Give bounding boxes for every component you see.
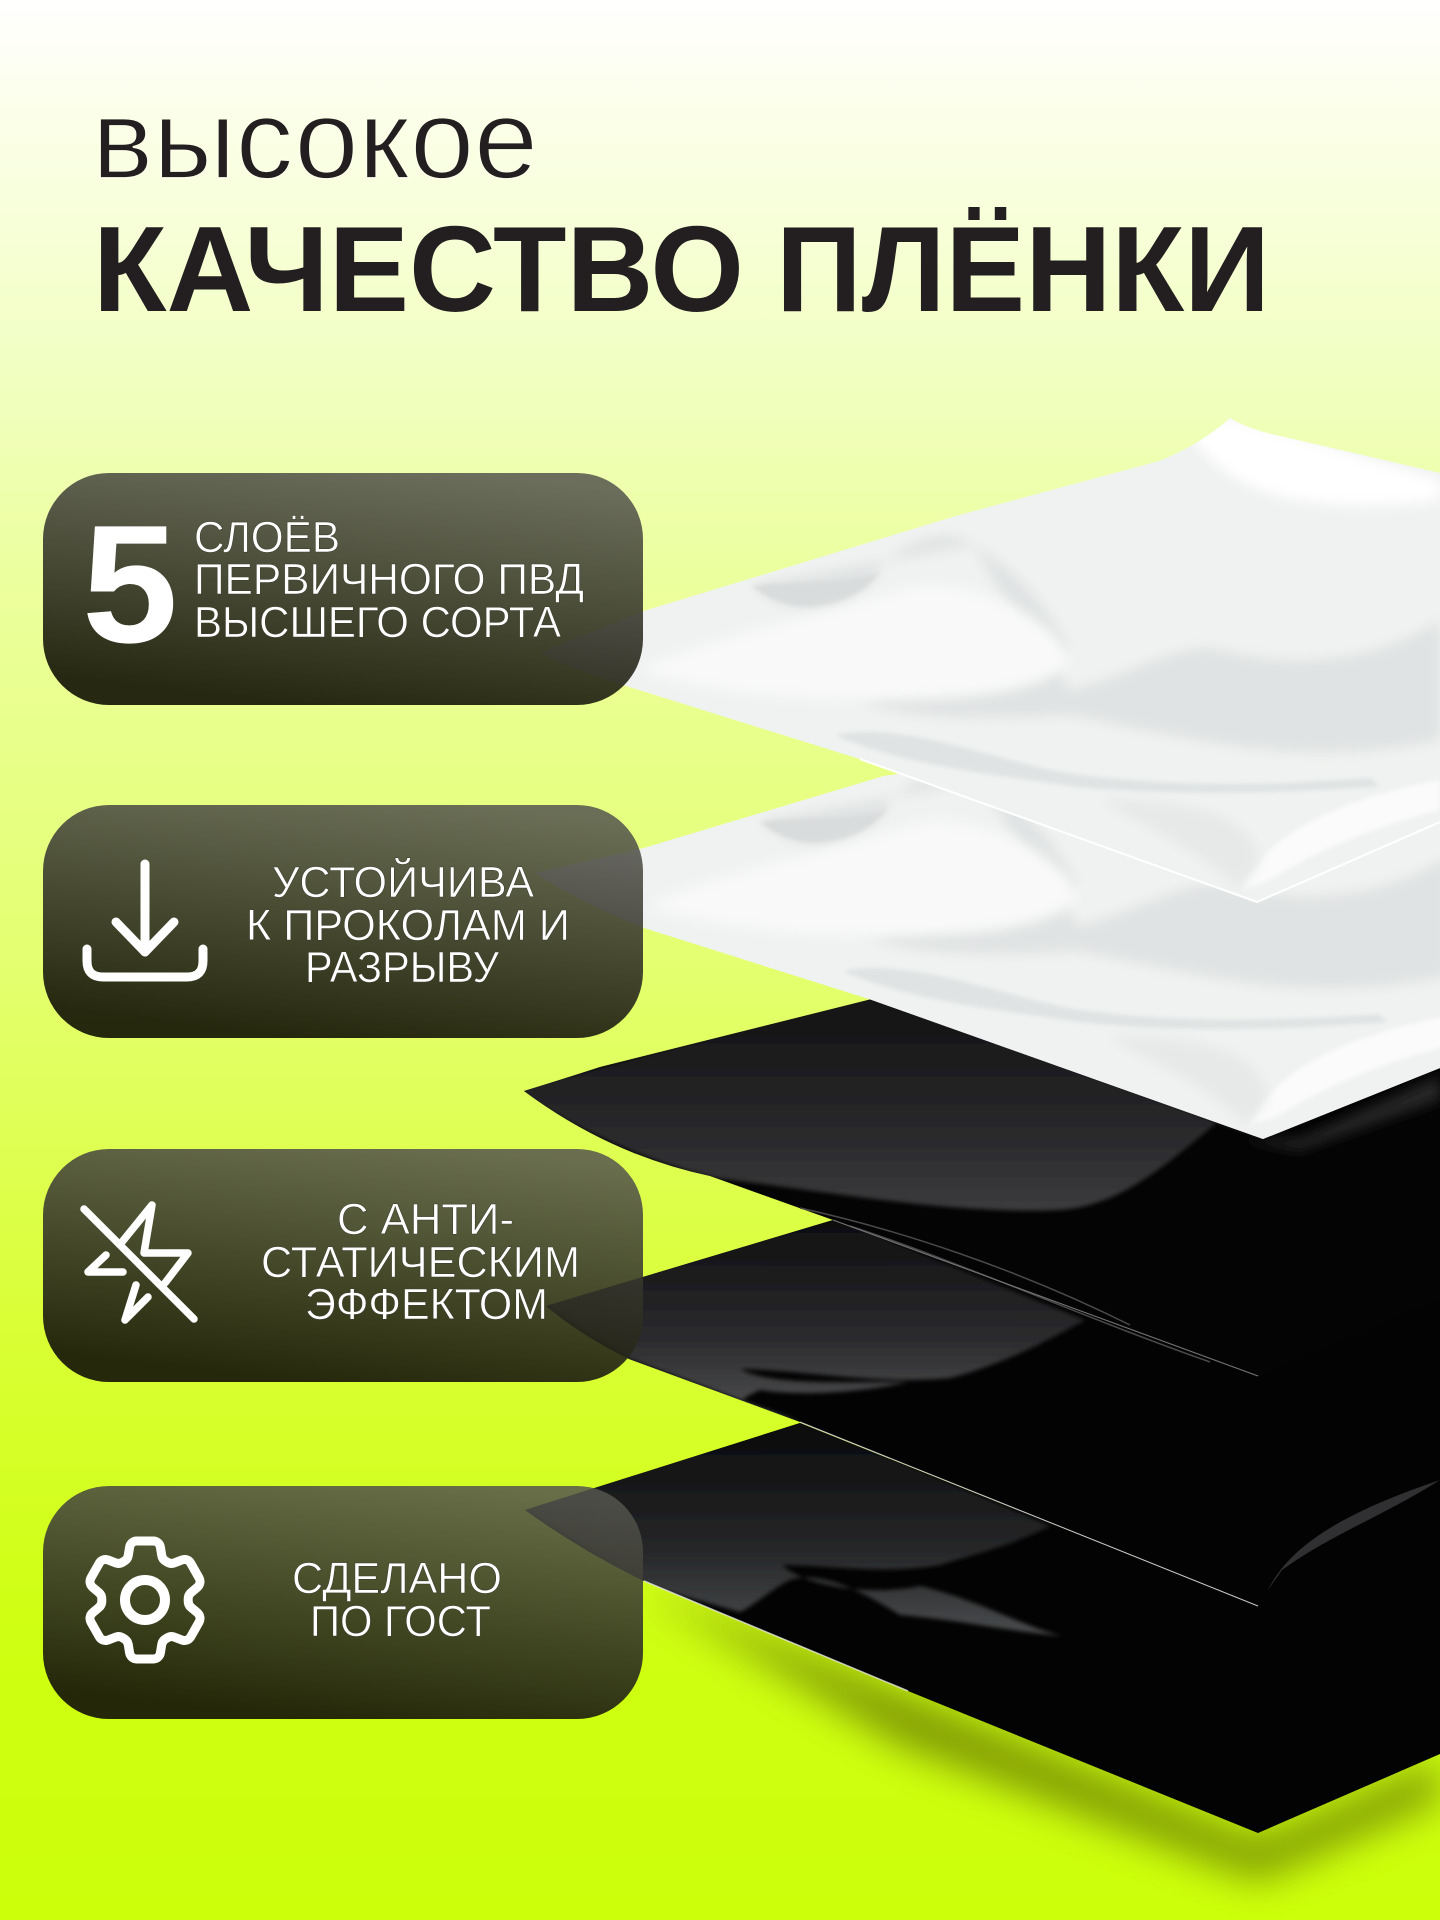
icon: download tray	[87, 864, 203, 977]
white film layer 1	[530, 418, 1440, 905]
card text: ПЕРВИЧНОГО ПВД	[194, 555, 584, 604]
card text	[261, 1195, 580, 1329]
card text: ВЫСШЕГО СОРТА	[194, 598, 562, 647]
icon: crossed lightning bolt	[84, 1205, 194, 1320]
card: GOST	[43, 1486, 643, 1719]
card text: УСТОЙЧИВА	[272, 856, 535, 907]
film 4 crease	[1268, 1480, 1440, 1590]
card text: РАЗРЫВУ	[305, 943, 500, 992]
drop shadow under bottom film	[640, 1585, 1440, 1880]
title line: качество плёнки: ПЛЁНКИ	[776, 201, 1270, 337]
title line: высокое: высокое	[92, 77, 538, 202]
card text	[246, 856, 570, 992]
card text: СТАТИЧЕСКИМ	[261, 1238, 580, 1287]
title	[92, 77, 1270, 337]
card text	[292, 1554, 502, 1646]
card: puncture resistance	[43, 805, 643, 1038]
big number 5: 5	[82, 490, 178, 678]
title line: качество плёнки	[93, 201, 1270, 337]
film 3 creases	[800, 1208, 1210, 1362]
card text: ПО ГОСТ	[310, 1597, 491, 1646]
card text: СЛОЁВ	[194, 513, 340, 562]
title line: качество плёнки: КАЧЕСТВО	[93, 201, 744, 337]
black film layer 4	[540, 1218, 1440, 1606]
icon: gear	[90, 1541, 200, 1659]
card text: СДЕЛАНО	[292, 1554, 502, 1603]
black film layer 3	[515, 995, 1440, 1376]
black film layer 5	[520, 1420, 1440, 1833]
film stack illustration	[515, 418, 1440, 1880]
card text	[194, 513, 584, 647]
card text: К ПРОКОЛАМ И	[246, 901, 570, 950]
card text: ЭФФЕКТОМ	[305, 1280, 548, 1329]
white film layer 2	[536, 774, 1440, 1139]
card: 5 layers	[43, 473, 643, 705]
card: antistatic	[43, 1149, 643, 1382]
card text: С АНТИ-	[337, 1195, 514, 1244]
